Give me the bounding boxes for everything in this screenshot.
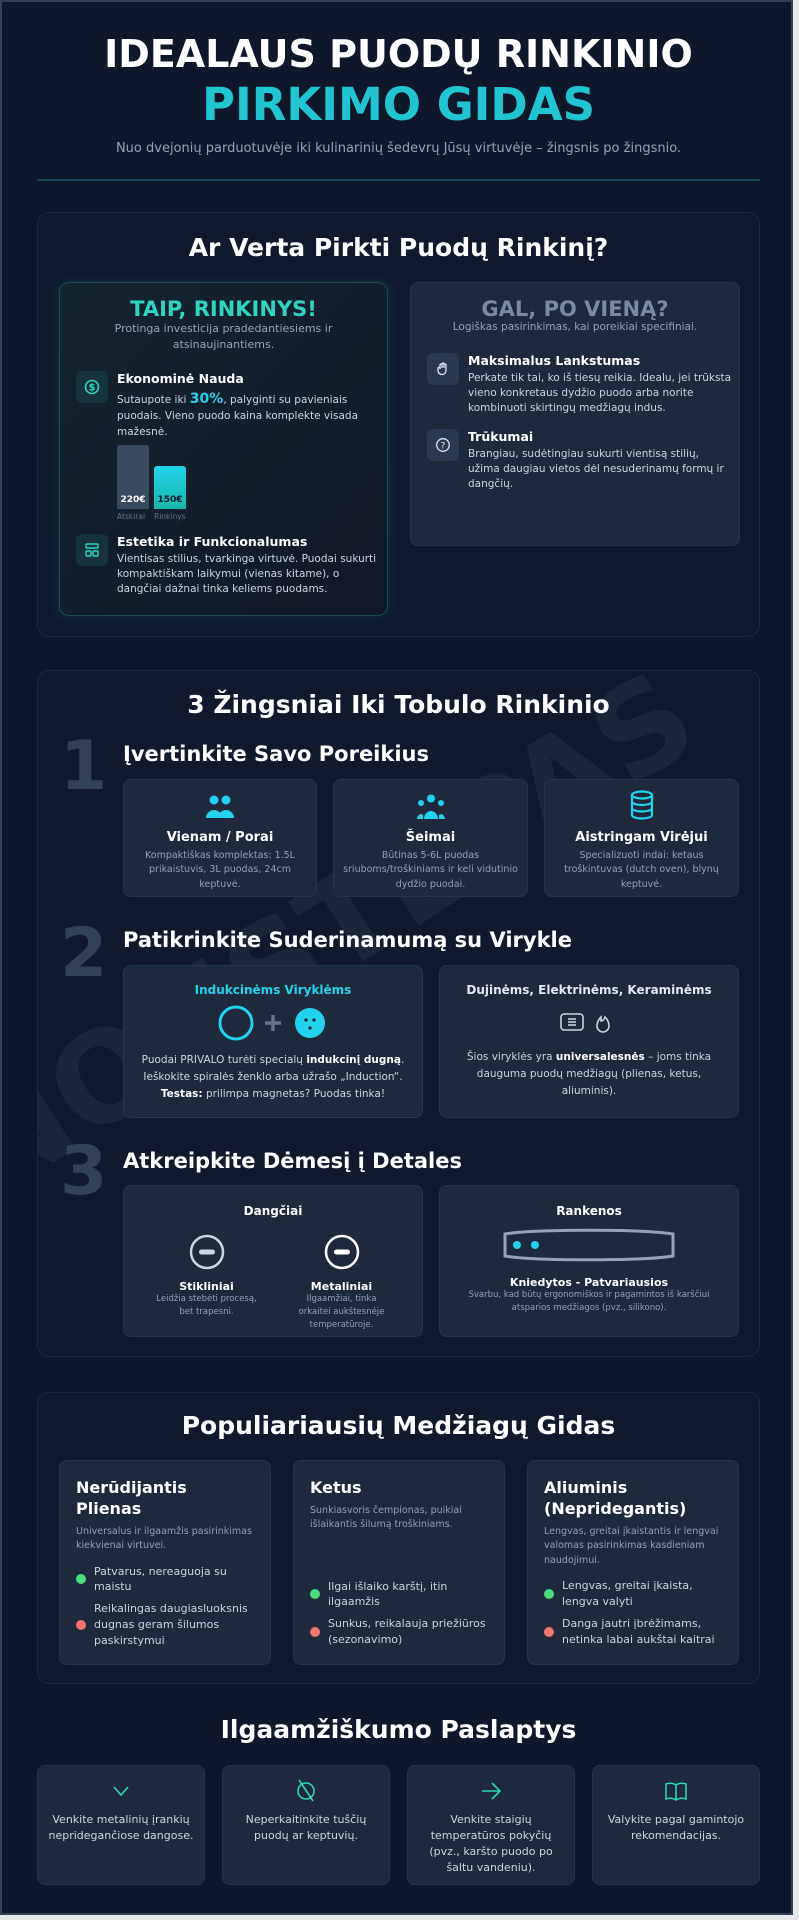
card: aluminium: Lengvas, greitai įkaista, lengva valyti (562, 1579, 693, 1608)
tip 4: Valykite pagal gamintojo rekomendacijas. (608, 1813, 744, 1842)
card: aluminium: Lengvas, greitai įkaistantis ir lengvai valomas pasirinkimas kasdieniam naudojimui. (544, 1526, 718, 1566)
card: handles: Svarbu, kad būtų ergonomiškos ir pagamintos iš karščiui atsparios medžiagos (pvz., silikono). (468, 1290, 710, 1313)
card: family: Būtinas 5-6L puodas sriuboms/troškiniams ir keli vidutinio dydžio puodai. (343, 850, 518, 890)
card: lids: Dangčiai (244, 1204, 302, 1218)
card: cast iron: Sunkiasvoris čempionas, puikiai išlaikantis šilumą troškiniams. (310, 1505, 462, 1530)
card: cast iron: Sunkus, reikalauja priežiūros (sezonavimo) (328, 1617, 486, 1646)
card: other stoves (439, 965, 739, 1118)
card: cast iron (293, 1460, 505, 1665)
panel: 3 steps (37, 670, 760, 1357)
step 3 number: 3 (60, 1132, 107, 1211)
icon: stoves (560, 1013, 610, 1033)
card: aluminium: (Nepridegantis) (544, 1499, 686, 1518)
step 3 heading: Atkreipkite Dėmesį į Detales (123, 1149, 462, 1173)
tip 3: Venkite staigių temperatūros pokyčių (pvz., karšto puodo po šaltu vandeniu). (429, 1813, 553, 1874)
heading: 3 Žingsniai Iki Tobulo Rinkinio (187, 690, 610, 719)
card: maybe: Maksimalus Lankstumas (468, 353, 640, 368)
card: handles: Kniedytos - Patvariausios (510, 1276, 668, 1289)
card: maybe: GAL, PO VIENĄ? (481, 297, 669, 321)
card: induction: Ieškokite spiralės ženklo arba užrašo „Induction“. (143, 1071, 403, 1083)
panel: materials (37, 1392, 760, 1684)
card: stainless (59, 1460, 271, 1665)
card: induction: Puodai PRIVALO turėti specialų indukcinį dugną. (142, 1054, 404, 1066)
heading: longevity: Ilgaamžiškumo Paslaptys (221, 1715, 576, 1744)
card: single: Kompaktiškas komplektas: 1.5L prikaistuvis, 3L puodas, 24cm keptuvė. (145, 850, 295, 890)
card: single (123, 779, 317, 897)
card: maybe: Logiškas pasirinkimas, kai poreikiai specifiniai. (453, 321, 697, 333)
icon: glass lid: Stikliniai (179, 1280, 234, 1293)
tip 4 (592, 1765, 760, 1885)
card: stainless: Patvarus, nereaguoja su maistu (94, 1564, 227, 1593)
card: maybe: Trūkumai (468, 429, 533, 444)
tip 3 (407, 1765, 575, 1885)
card: induction: Indukcinėms Viryklėms (195, 983, 351, 997)
icon: glass lid (156, 1234, 257, 1317)
card: yes (59, 282, 388, 616)
step 1 heading: Įvertinkite Savo Poreikius (123, 742, 429, 766)
bar chart: 220€ (120, 495, 146, 505)
text: aesthetics (117, 534, 376, 595)
icon: metal lid: Ilgaamžiai, tinka orkaitei aukštesnėje temperatūroje. (299, 1294, 384, 1330)
icon: question (427, 429, 459, 461)
card: aluminium: Danga jautri įbrėžimams, netinka labai aukštai kaitrai (562, 1617, 715, 1646)
card: aluminium: Aliuminis (544, 1478, 627, 1497)
text: economic: Ekonominė Nauda (117, 371, 244, 386)
icon: hand (427, 353, 459, 385)
bar chart: Rinkinys (154, 512, 186, 521)
card: aluminium (527, 1460, 739, 1665)
card: other stoves: Dujinėms, Elektrinėms, Keraminėms (466, 983, 712, 997)
card: induction: Testas: prilimpa magnetas? Puodas tinka! (161, 1088, 385, 1100)
card: handles (439, 1185, 739, 1337)
bar chart: 150€ (157, 495, 183, 505)
card: cast iron: Ketus (310, 1478, 362, 1497)
card: induction (123, 965, 423, 1118)
panel: set worth (37, 212, 760, 637)
text: economic (117, 371, 358, 438)
icon: coin (76, 371, 108, 403)
title: PIRKIMO GIDAS (202, 78, 595, 131)
card: chef (544, 779, 739, 897)
card: single: Vienam / Porai (167, 830, 273, 845)
icon: induction (218, 1006, 325, 1040)
bar chart: Atskirai (117, 512, 145, 521)
tip 2 (222, 1765, 390, 1885)
title: IDEALAUS PUODŲ RINKINIO (104, 32, 693, 76)
icon: question: ? (441, 442, 446, 452)
card: maybe: Brangiau, sudėtingiau sukurti vientisą stilių, užima daugiau vietos dėl nesuderinamų formų ir dangčių. (468, 448, 724, 490)
tip 1: Venkite metalinių įrankių nepridegančiose dangose. (48, 1813, 193, 1842)
card: maybe: Perkate tik tai, ko iš tiesų reikia. Idealu, jei trūksta vieno konkretaus dydžio puodo arba norite kombinuoti skirtingų medžiagų indus. (468, 372, 731, 414)
text: aesthetics: Vientisas stilius, tvarkinga virtuvė. Puodai sukurti kompaktiškam laikymui (vienas kitame), o dangčiai dažnai tinka keliems puodams. (117, 553, 376, 595)
icon: coin: $ (89, 382, 96, 394)
card: stainless: Nerūdijantis (76, 1478, 187, 1497)
card: yes: TAIP, RINKINYS! (130, 297, 317, 321)
card: chef: Specializuoti indai: ketaus troškintuvas (dutch oven), blynų keptuvė. (564, 850, 719, 890)
icon: metal lid: Metaliniai (311, 1280, 372, 1293)
heading: Populiariausių Medžiagų Gidas (182, 1411, 615, 1440)
bar chart (117, 445, 186, 521)
card: stainless: Universalus ir ilgaamžis pasirinkimas kiekvienai virtuvei. (76, 1526, 252, 1551)
card: stainless: Plienas (76, 1499, 141, 1518)
card: stainless: Reikalingas daugiasluoksnis dugnas geram šilumos paskirstymui (94, 1602, 248, 1647)
subtitle: Nuo dvejonių parduotuvėje iki kulinarinių šedevrų Jūsų virtuvėje – žingsnis po žingsnio. (116, 141, 681, 156)
step 1 number: 1 (60, 727, 107, 806)
step 2 heading: Patikrinkite Suderinamumą su Virykle (123, 928, 572, 952)
icon: layout (76, 534, 108, 566)
icon: handle (504, 1228, 674, 1262)
card: maybe (410, 282, 740, 546)
step 2 number: 2 (60, 914, 107, 993)
card: family (333, 779, 528, 897)
title (104, 32, 693, 131)
tip 2: Neperkaitinkite tuščių puodų ar keptuvių. (246, 1813, 366, 1842)
text: economic: Sutaupote iki 30%, palyginti su pavieniais puodais. Vieno puodo kaina komplekte visada mažesnė. (117, 391, 358, 438)
icon: glass lid: Leidžia stebėti procesą, (156, 1294, 257, 1304)
tips row (37, 1765, 760, 1885)
icon: glass lid: bet trapesni. (179, 1307, 234, 1317)
card: cast iron: Ilgai išlaiko karštį, itin ilgaamžis (328, 1580, 447, 1608)
tip 1 (37, 1765, 205, 1885)
card: chef: Aistringam Virėjui (575, 830, 708, 845)
card: other stoves: Šios viryklės yra universalesnės – joms tinka dauguma puodų medžiagų (plienas, ketus, aliuminis). (467, 1051, 711, 1097)
icon: metal lid (299, 1234, 384, 1330)
card: handles: Rankenos (556, 1204, 622, 1218)
text: aesthetics: Estetika ir Funkcionalumas (117, 534, 307, 549)
heading: Ar Verta Pirkti Puodų Rinkinį? (189, 233, 608, 262)
card: family: Šeimai (406, 830, 455, 845)
card: yes: Protinga investicija pradedantiesiems ir atsinaujinantiems. (115, 322, 332, 351)
card: lids (123, 1185, 423, 1337)
